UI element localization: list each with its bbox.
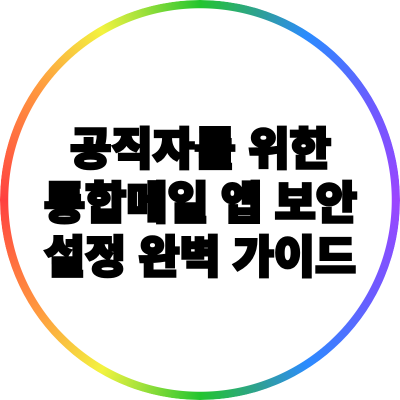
title: 공직자를 위한	[70, 126, 331, 174]
title: 설정 완벽 가이드	[44, 234, 356, 282]
title: 통합메일 앱 보안	[44, 180, 357, 228]
